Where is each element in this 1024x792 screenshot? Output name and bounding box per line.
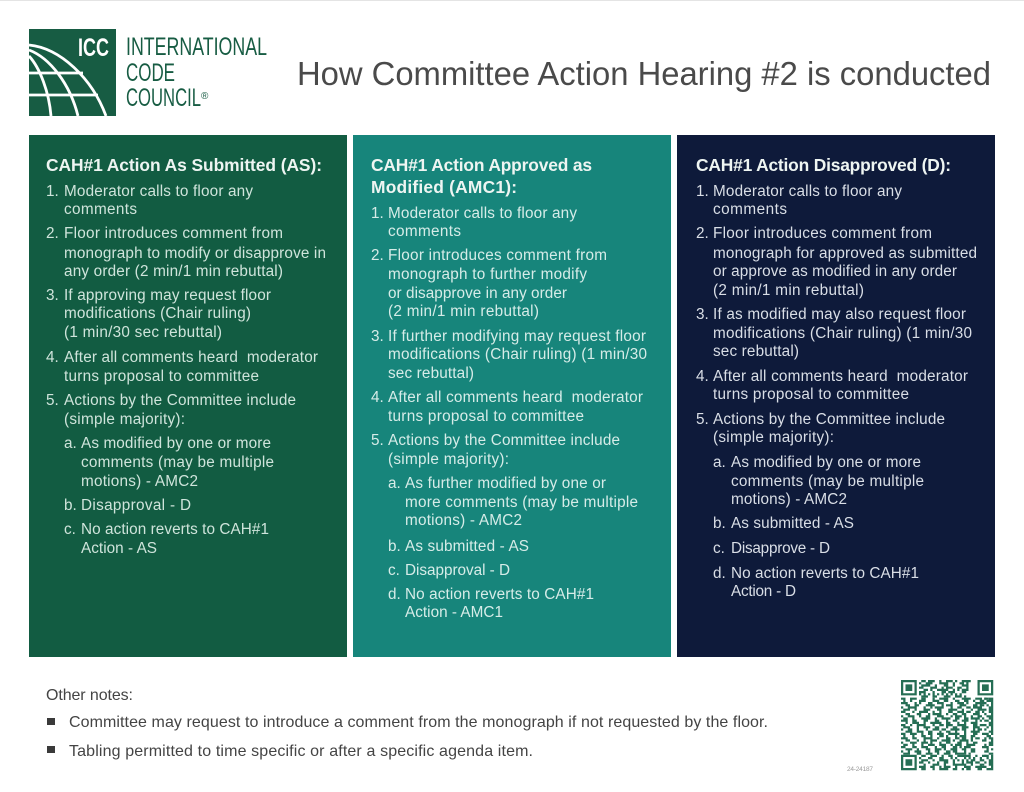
step 5 options: [388, 475, 638, 621]
step 4: After all comments heard moderator: [64, 349, 318, 366]
step 2: (2 min/1 min rebuttal): [388, 303, 539, 320]
step 5 options: No action reverts to CAH#1: [405, 586, 594, 603]
step 5 options: [64, 435, 274, 557]
step 5 options: comments (may be multiple: [731, 473, 924, 490]
step 5 options: b.: [64, 497, 77, 514]
step 4: [696, 368, 968, 403]
step 1: Moderator calls to floor any: [713, 183, 902, 200]
step 5 options: Disapproval - D: [81, 497, 191, 514]
step 5 options: No action reverts to CAH#1: [731, 565, 919, 582]
step 3: If approving may request floor: [64, 287, 271, 304]
step 5 options: motions) - AMC2: [405, 512, 522, 529]
panel heading: CAH#1 Action Disapproved (D):: [696, 155, 951, 175]
panel: CAH#1 Action Approved as Modified: [353, 135, 671, 657]
logo wordmark: [126, 33, 267, 112]
panel: CAH#1 Action Disapproved: [677, 135, 995, 657]
step 5: (simple majority):: [388, 451, 509, 468]
panel: CAH#1 Action As Submitted: [29, 135, 347, 657]
step 5: [46, 392, 296, 428]
QR code: [901, 681, 993, 769]
step 4: [46, 349, 318, 385]
step 5 options: Disapproval - D: [405, 562, 510, 579]
step 2: Floor introduces comment from: [713, 225, 932, 242]
step 3: sec rebuttal): [713, 343, 799, 360]
step 4: 4.: [696, 368, 709, 385]
step 5 options: Action - AMC1: [405, 604, 503, 621]
step 2: any order (2 min/1 min rebuttal): [64, 263, 283, 280]
step 4: After all comments heard moderator: [388, 389, 643, 406]
step 2: [371, 247, 607, 320]
step 3: modifications (Chair ruling): [64, 305, 251, 322]
step 5: Actions by the Committee include: [713, 411, 945, 428]
step 5 options: No action reverts to CAH#1: [81, 521, 269, 538]
step 2: 2.: [696, 225, 709, 242]
step 5: 5.: [696, 411, 709, 428]
step 5 options: motions) - AMC2: [731, 491, 847, 508]
step 5 options: Disapprove - D: [731, 540, 830, 557]
step 1: 1.: [371, 205, 384, 222]
step 1: 1.: [46, 183, 59, 200]
step 3: modifications (Chair ruling) (1 min/30: [388, 346, 647, 363]
step 4: 4.: [371, 389, 384, 406]
step 3: sec rebuttal): [388, 365, 474, 382]
step 4: turns proposal to committee: [388, 408, 584, 425]
step 5 options: b.: [388, 538, 401, 555]
step 2: monograph to modify or disapprove in: [64, 245, 326, 262]
panel heading: Modified (AMC1):: [371, 177, 517, 197]
step 5 options: c.: [64, 521, 76, 538]
step 1: [371, 205, 577, 240]
icon: ICC globe mark: [29, 29, 116, 116]
step 5 options: d.: [388, 586, 401, 603]
step 1: comments: [713, 201, 787, 218]
step 2: monograph for approved as submitted: [713, 245, 977, 262]
step 3: [371, 328, 647, 382]
step 5: 5.: [371, 432, 384, 449]
step 5 options: As modified by one or more: [731, 454, 921, 471]
note 2: Tabling permitted to time specific or after a specific agenda item.: [69, 743, 533, 760]
step 5 options: Action - D: [731, 583, 796, 600]
step 5 options: As submitted - AS: [731, 515, 854, 532]
step 3: [46, 287, 271, 341]
step 4: 4.: [46, 349, 59, 366]
step 1: Moderator calls to floor any: [64, 183, 253, 200]
step 1: [696, 183, 902, 218]
step 5: Actions by the Committee include: [388, 432, 620, 449]
other notes: [46, 687, 768, 760]
step 3: (1 min/30 sec rebuttal): [64, 324, 222, 341]
panel heading: CAH#1 Action As Submitted (AS):: [46, 155, 322, 175]
step 3: If as modified may also request floor: [713, 306, 966, 323]
step 3: If further modifying may request floor: [388, 328, 646, 345]
step 3: modifications (Chair ruling) (1 min/30: [713, 325, 972, 342]
logo wordmark: ®: [201, 91, 209, 102]
step 4: turns proposal to committee: [713, 386, 909, 403]
step 2: [46, 225, 326, 280]
step 2: (2 min/1 min rebuttal): [713, 282, 864, 299]
step 5 options: As submitted - AS: [405, 538, 529, 555]
step 2: [696, 225, 977, 299]
note 1: Committee may request to introduce a comment from the monograph if not requested by the floor.: [69, 714, 768, 731]
step 5: [371, 432, 620, 468]
step 3: 3.: [371, 328, 384, 345]
step 2: Floor introduces comment from: [64, 225, 283, 242]
step 5 options: As modified by one or more: [81, 435, 271, 452]
step 2: 2.: [371, 247, 384, 264]
step 1: comments: [64, 201, 137, 218]
step 5 options: a.: [713, 454, 726, 471]
step 2: or approve as modified in any order: [713, 263, 957, 280]
notes heading: Other notes:: [46, 687, 133, 704]
step 5 options: motions) - AMC2: [81, 473, 198, 490]
step 5: (simple majority):: [64, 411, 185, 428]
step 5: 5.: [46, 392, 59, 409]
logo wordmark: CODE: [126, 59, 175, 87]
step 2: 2.: [46, 225, 59, 242]
step 4: After all comments heard moderator: [713, 368, 968, 385]
step 5 options: c.: [388, 562, 400, 579]
step 5 options: a.: [64, 435, 77, 452]
step 3: [696, 306, 972, 360]
step 5 options: a.: [388, 475, 401, 492]
logo wordmark: INTERNATIONAL: [126, 33, 267, 61]
step 5 options: d.: [713, 565, 726, 582]
step 2: monograph to further modify: [388, 266, 587, 283]
step 5: (simple majority):: [713, 429, 834, 446]
panel heading: [371, 155, 592, 197]
step 5 options: c.: [713, 540, 725, 557]
step 5 options: comments (may be multiple: [81, 454, 274, 471]
step 1: comments: [388, 223, 461, 240]
step 1: [46, 183, 253, 218]
document number: 24-24187: [847, 766, 873, 773]
panel heading: CAH#1 Action Approved as: [371, 155, 592, 175]
step 1: Moderator calls to floor any: [388, 205, 577, 222]
step 5 options: [713, 454, 924, 600]
step 1: 1.: [696, 183, 709, 200]
step 3: 3.: [46, 287, 59, 304]
logo wordmark: COUNCIL: [126, 84, 201, 112]
icon: ICC globe mark: ICC: [78, 34, 109, 62]
title: How Committee Action Hearing #2 is conducted: [297, 55, 991, 92]
step 3: 3.: [696, 306, 709, 323]
step 5: [696, 411, 945, 446]
step 5 options: Action - AS: [81, 540, 157, 557]
step 2: or disapprove in any order: [388, 285, 567, 302]
step 4: [371, 389, 643, 425]
step 5 options: As further modified by one or: [405, 475, 606, 492]
step 4: turns proposal to committee: [64, 368, 259, 385]
step 5 options: more comments (may be multiple: [405, 494, 638, 511]
step 2: Floor introduces comment from: [388, 247, 607, 264]
logo: International Code Council: [29, 29, 267, 116]
step 5: Actions by the Committee include: [64, 392, 296, 409]
step 5 options: b.: [713, 515, 726, 532]
